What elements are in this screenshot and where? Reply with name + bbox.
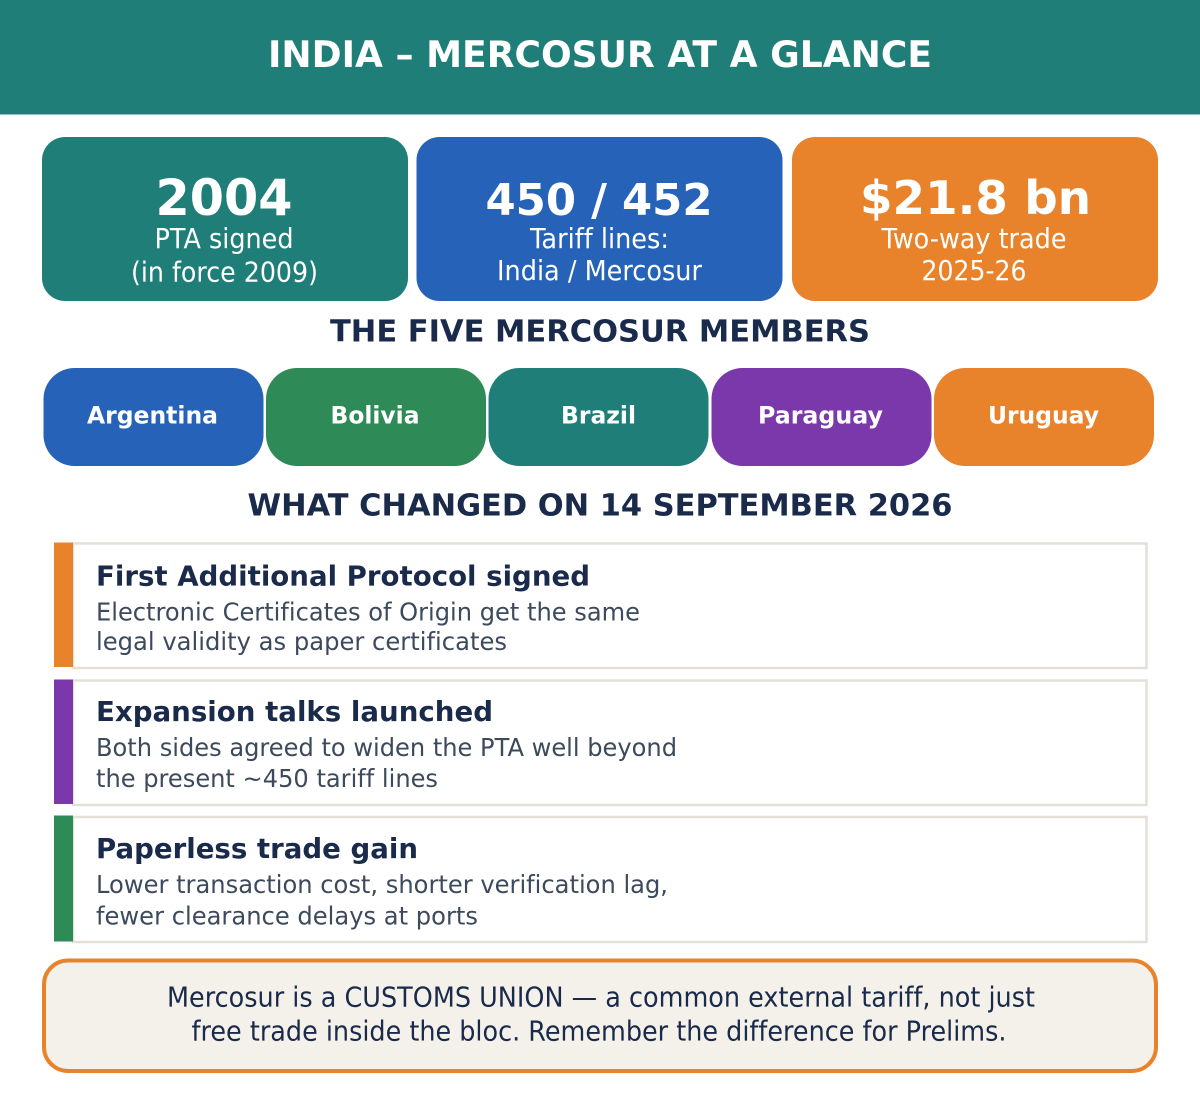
change card: protocol: Electronic Certificates of Origin get the same: [96, 598, 640, 626]
stat card: 2004: (in force 2009): [131, 256, 318, 288]
stat card: tariff lines: 450 / 452: [486, 175, 712, 226]
change card: expansion: [54, 680, 1146, 805]
change card: protocol: legal validity as paper certificates: [96, 627, 507, 656]
chip: Uruguay: Uruguay: [988, 402, 1099, 430]
stat card: 2004: [42, 137, 408, 301]
title: INDIA – MERCOSUR AT A GLANCE: [268, 33, 932, 76]
stat card: 2004: 2004: [156, 169, 292, 227]
change card: paperless: fewer clearance delays at ports: [96, 902, 478, 930]
heading: what changed: WHAT CHANGED ON 14 SEPTEMBER 2026: [248, 488, 952, 524]
chip: Brazil: Brazil: [561, 402, 636, 430]
chip: Bolivia: Bolivia: [330, 402, 420, 430]
chip: Argentina: [44, 368, 264, 466]
chip: Paraguay: [712, 368, 932, 466]
change card: expansion: Both sides agreed to widen the PTA well beyond: [96, 733, 677, 762]
stat card: two-way trade: $21.8 bn: [860, 171, 1091, 225]
stat card: tariff lines: [416, 137, 782, 301]
change card: paperless: Lower transaction cost, shorter verification lag,: [96, 870, 668, 899]
stat card: tariff lines: India / Mercosur: [497, 254, 702, 287]
chip: Uruguay: [934, 368, 1154, 466]
change card: protocol: First Additional Protocol signed: [96, 560, 590, 592]
chip: Argentina: Argentina: [87, 402, 218, 430]
callout: [44, 960, 1156, 1071]
change card: expansion: the present ~450 tariff lines: [96, 764, 438, 793]
callout: Mercosur is a CUSTOMS UNION — a common external tariff, not just: [167, 982, 1035, 1014]
title banner: [0, 0, 1200, 114]
stat card: 2004: PTA signed: [154, 222, 294, 255]
stat card: two-way trade: [792, 137, 1158, 301]
stat card: two-way trade: 2025-26: [922, 254, 1026, 287]
change card: expansion: Expansion talks launched: [96, 696, 493, 728]
stat card: two-way trade: Two-way trade: [881, 222, 1066, 255]
change card: protocol: [54, 542, 1146, 668]
callout: free trade inside the bloc. Remember the difference for Prelims.: [192, 1016, 1006, 1048]
chip: Bolivia: [266, 368, 486, 466]
change card: paperless: Paperless trade gain: [96, 833, 418, 865]
stat card: tariff lines: Tariff lines:: [529, 222, 669, 255]
heading: five members: THE FIVE MERCOSUR MEMBERS: [330, 314, 870, 350]
chip: Brazil: [488, 368, 708, 466]
change card: paperless: [54, 816, 1146, 942]
chip: Paraguay: Paraguay: [758, 402, 883, 430]
member chips: [44, 368, 1154, 466]
